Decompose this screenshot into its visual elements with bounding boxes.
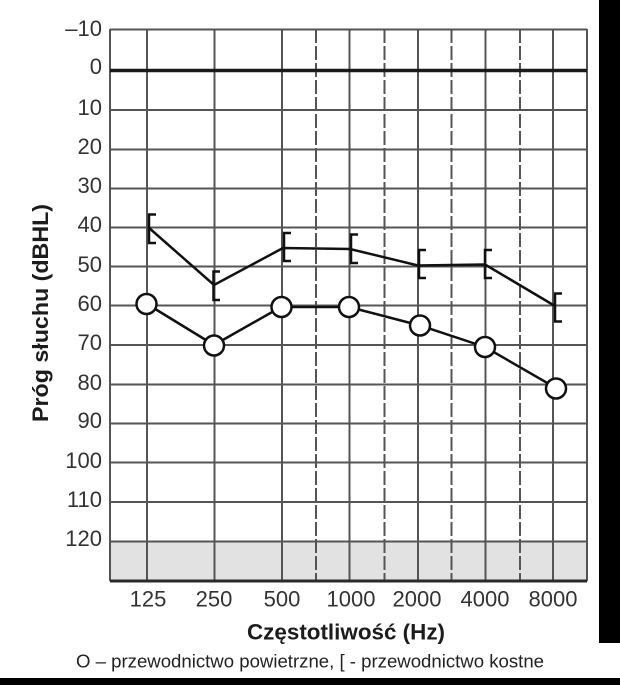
y axis tick labels: 80: [78, 370, 102, 395]
x axis tick labels: 8000: [529, 586, 577, 612]
y axis tick labels: –10: [65, 16, 102, 41]
x axis tick labels: 1000: [327, 586, 375, 612]
y axis tick labels: 50: [78, 252, 102, 277]
y axis tick labels: 100: [65, 448, 102, 473]
black panel: right edge: [599, 0, 620, 643]
shaded region below 120 dBHL: [110, 542, 587, 581]
y axis tick labels: 110: [67, 487, 102, 512]
y axis tick labels: 60: [78, 291, 102, 316]
y axis tick labels: 20: [78, 134, 102, 159]
air conduction series: [136, 294, 566, 398]
y axis tick labels: [65, 16, 102, 551]
air conduction line: [147, 304, 556, 388]
bone conduction markers: [149, 214, 562, 322]
legend caption: O – przewodnictwo powietrzne, [ - przewodnictwo kostne: [76, 652, 544, 672]
x axis tick labels: [130, 586, 577, 612]
y axis tick labels: 70: [78, 330, 102, 355]
x axis tick labels: 250: [196, 586, 232, 612]
y axis title: Próg słuchu (dBHL): [28, 204, 53, 422]
y axis tick labels: 10: [78, 95, 102, 120]
x axis tick labels: 4000: [461, 586, 509, 612]
x axis tick labels: 2000: [393, 586, 441, 612]
y axis tick labels: 120: [65, 526, 102, 551]
air conduction markers: [136, 294, 566, 398]
bone conduction series: [148, 214, 562, 322]
y axis tick labels: 40: [78, 212, 102, 237]
y axis tick labels: 0: [90, 54, 102, 79]
chart grid: [110, 29, 587, 581]
bone conduction line: [148, 227, 555, 306]
x axis tick labels: 500: [264, 586, 300, 612]
x axis tick labels: 125: [130, 586, 166, 612]
black panel: bottom edge: [0, 678, 620, 685]
x axis title: Częstotliwość (Hz): [247, 620, 445, 644]
y axis tick labels: 90: [78, 408, 102, 433]
y axis tick labels: 30: [78, 173, 102, 198]
